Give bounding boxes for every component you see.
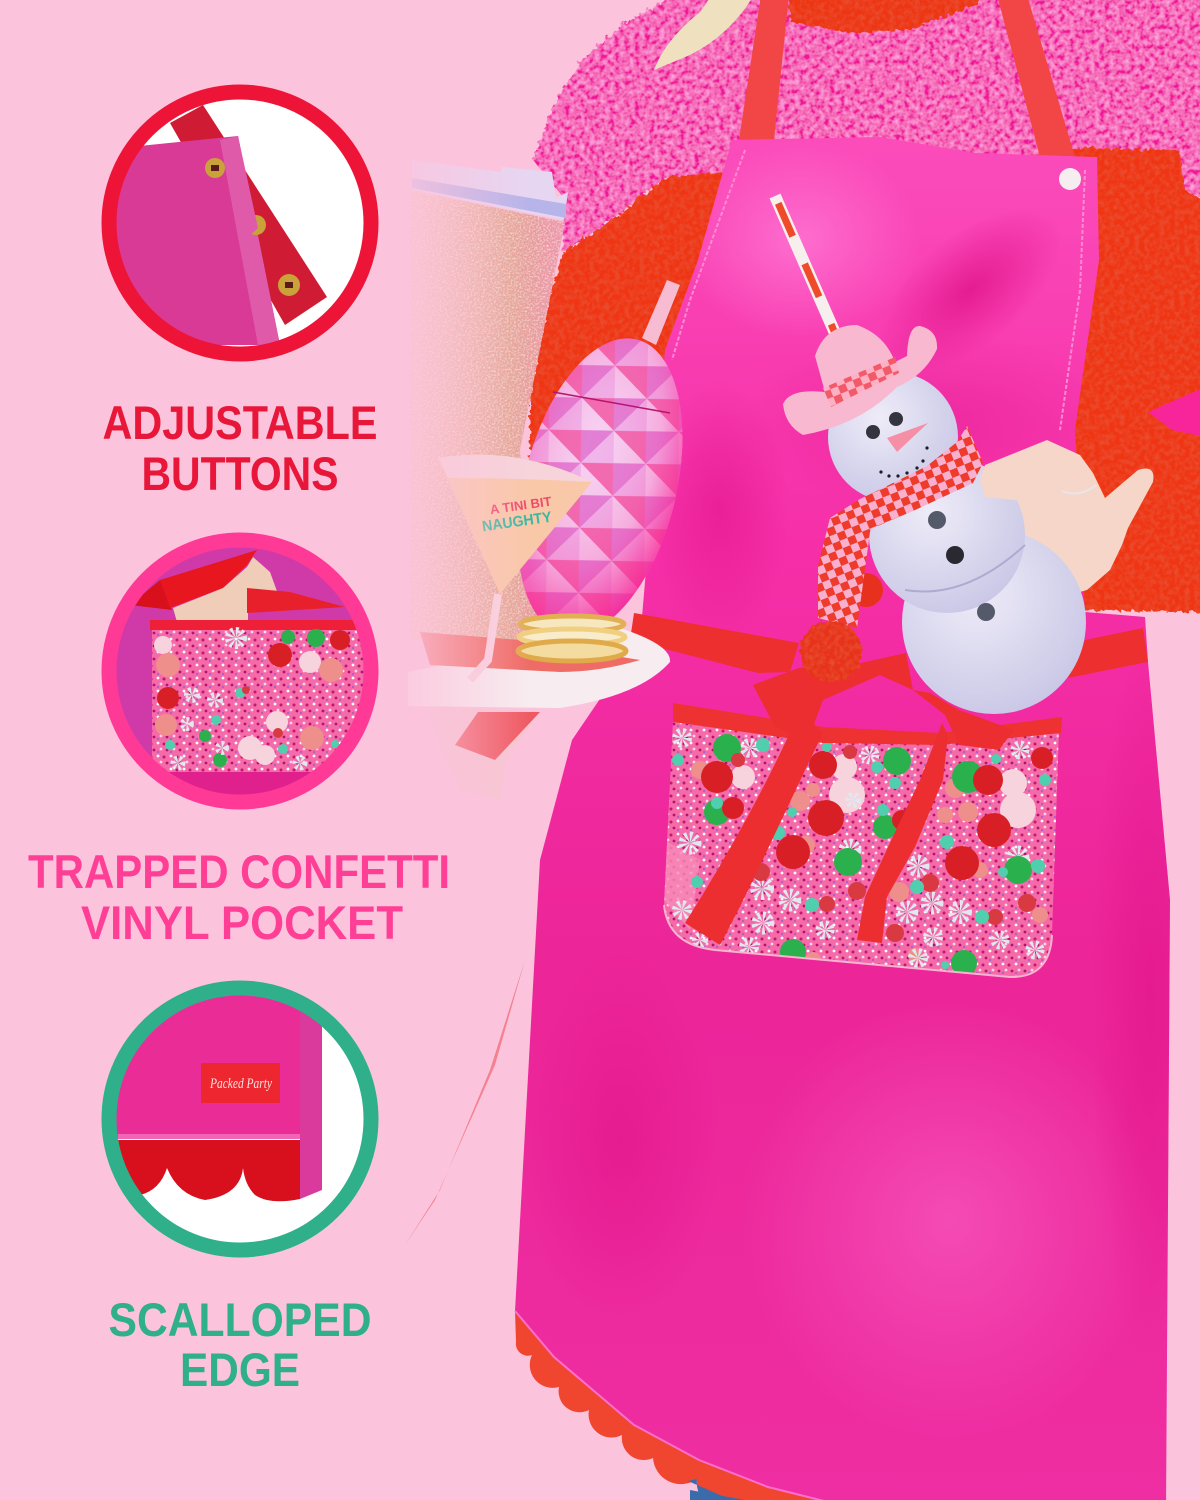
top button: [1059, 168, 1081, 190]
red scallop edge: [110, 1140, 300, 1201]
tumbler lid: [412, 160, 568, 220]
side hem: [300, 1010, 322, 1199]
scalloped edge inset: [116, 996, 364, 1242]
egg pink glow: [489, 321, 711, 653]
scalloped edge ring: [109, 988, 371, 1250]
trapped confetti ring: [109, 540, 371, 802]
adjustable buttons inset: [100, 98, 365, 348]
photo: tumbler: [410, 160, 568, 640]
scalloped edge heading: SCALLOPED: [108, 1293, 372, 1346]
neck straps: [739, 0, 1075, 157]
red bow ribbons: [685, 653, 1014, 945]
cowboy hat: [783, 325, 937, 435]
adjustable buttons heading: [102, 396, 378, 500]
pocket: [152, 630, 366, 772]
photo: sweater: [530, 0, 1200, 612]
scalloped edge heading: EDGE: [180, 1343, 300, 1396]
fabric folds: [520, 140, 1200, 1440]
tray: [408, 628, 670, 708]
dark red behind sleeve: [135, 580, 172, 610]
egg lid seam: [553, 392, 670, 413]
martini label: NAUGHTY: [481, 509, 553, 535]
tumbler body: [410, 190, 565, 640]
body: [902, 530, 1086, 714]
gold bangles: [518, 616, 626, 661]
martini glass: [438, 455, 592, 680]
pocket binding: [673, 703, 1062, 745]
egg straw: [642, 280, 680, 345]
hand palm behind snowman: [1000, 468, 1153, 600]
trapped confetti heading: TRAPPED CONFETTI: [28, 845, 450, 898]
pink fabric: [116, 996, 322, 1138]
shiny pink egg cup: [489, 280, 711, 653]
tray with napkin and bangles: [408, 616, 670, 708]
apron: [500, 130, 1200, 1500]
gold buttons: [205, 158, 300, 296]
pom-pom: [800, 621, 862, 683]
confetti pieces: [672, 733, 1053, 976]
trapped confetti inset: [116, 548, 364, 794]
fingers over snowman: [980, 440, 1093, 500]
snowman cup: [775, 196, 1096, 714]
blonde hair: [654, 0, 754, 70]
hem edge line: [515, 1311, 860, 1500]
buttons: [928, 511, 946, 529]
red sweater bands and sleeves: [530, 0, 1200, 612]
scalloped edge heading: [108, 1293, 372, 1396]
jeans: [688, 1479, 760, 1500]
red band: [247, 588, 345, 613]
confetti vinyl pocket: [660, 700, 1062, 990]
scalloped red hem: [515, 1311, 860, 1500]
apron corner: [100, 136, 280, 345]
ring: [1062, 485, 1096, 493]
hem stitching: [672, 150, 1085, 430]
brand label: [201, 1063, 280, 1103]
strap: [170, 105, 327, 325]
hand: [173, 557, 282, 622]
pom-pom behind: [849, 573, 883, 607]
inset confetti: [154, 629, 350, 767]
brand label: Packed Party: [209, 1076, 272, 1092]
left sleeve under tray: [427, 705, 540, 800]
pink sweater: [533, 0, 1200, 253]
trapped confetti heading: [28, 845, 450, 949]
adjustable buttons heading: ADJUSTABLE: [102, 396, 378, 449]
adjustable buttons heading: BUTTONS: [142, 447, 338, 500]
pink fleck on right sleeve: [1148, 385, 1200, 438]
face: [866, 425, 880, 439]
waist ribbon: [630, 613, 1148, 678]
red sleeve: [160, 550, 257, 608]
ribbon tail right: [857, 723, 948, 943]
loose red ribbon: [405, 960, 525, 1245]
snowman straw: [775, 196, 838, 340]
fade overlay on left photo edge: [380, 90, 530, 820]
martini label: [479, 494, 555, 535]
napkin: [420, 632, 640, 672]
martini label: A TINI BIT: [489, 494, 552, 517]
trapped confetti heading: VINYL POCKET: [81, 896, 403, 949]
bow loops: [753, 653, 913, 740]
scarf: [818, 426, 983, 628]
adjustable buttons ring: [109, 92, 371, 354]
ribbon tail left: [685, 710, 823, 945]
